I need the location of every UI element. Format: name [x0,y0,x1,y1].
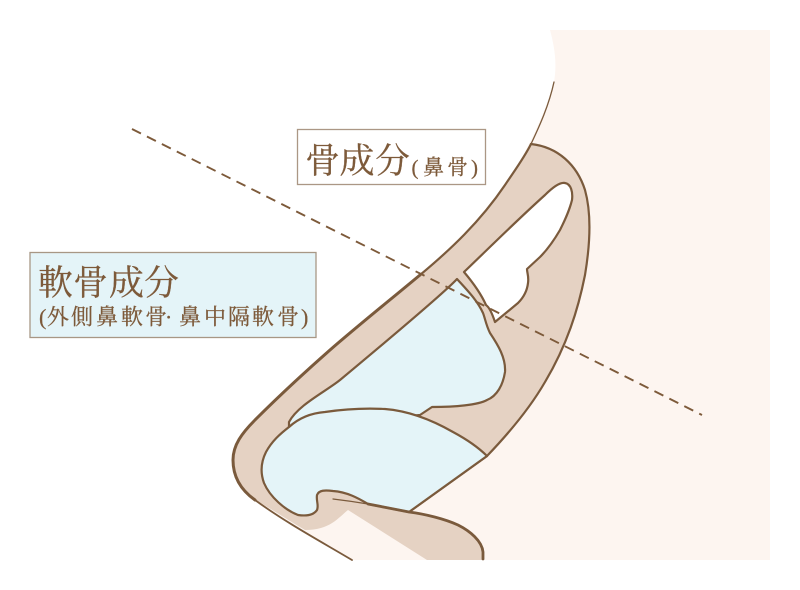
label: bone component: (鼻骨) [412,156,478,180]
panel: upper lateral cartilage (blue) [289,279,505,428]
panel: alar cartilage (blue) [262,409,487,515]
tissue outer contour [409,144,590,512]
panel: tan nose tissue [232,144,590,560]
panel: nasal cavity opening (white) [464,183,572,322]
label: cartilage component [30,252,316,338]
dashed line: bone and cartilage boundary [132,129,702,415]
label: bone component: 骨成分 [305,142,410,181]
outline: nostril rim [333,499,483,559]
outline: nose profile [233,82,554,560]
label: bone component [298,130,486,184]
panel: skin background [232,30,770,560]
label: cartilage component: 軟骨成分 [38,264,179,303]
label: cartilage component: (外側鼻軟骨·鼻中隔軟骨) [39,304,308,330]
